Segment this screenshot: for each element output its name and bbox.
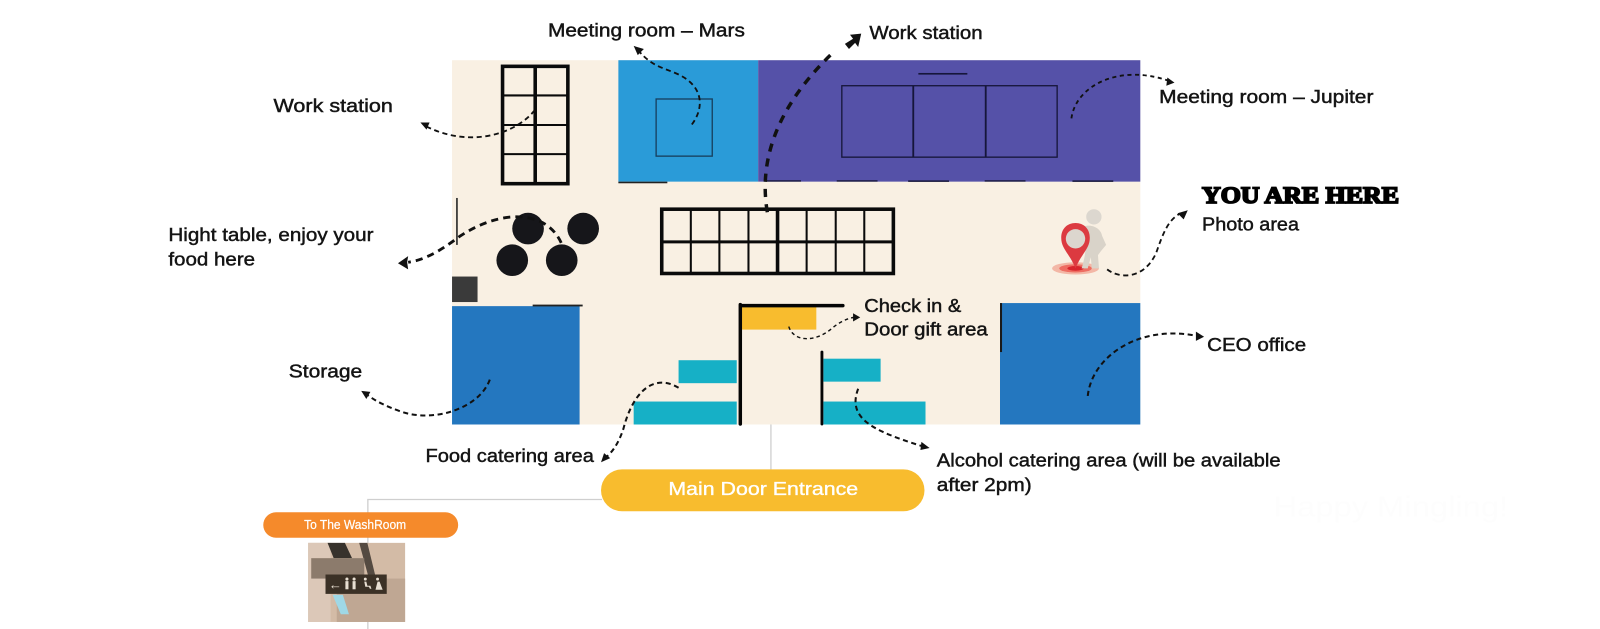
arrow: photo area <box>1107 210 1188 275</box>
arrow: high table <box>398 217 561 269</box>
label: food catering: Food catering area <box>426 445 594 466</box>
check in desk <box>742 307 816 330</box>
label: storage: Storage <box>289 361 362 382</box>
label: high table: food here <box>168 248 255 269</box>
alcohol catering tables <box>823 359 926 424</box>
button: to the washroom: To The WashRoom <box>304 517 406 532</box>
button: main door entrance <box>601 469 924 511</box>
arrow: storage <box>361 380 490 415</box>
label: CEO office: CEO office <box>1207 334 1306 355</box>
label: check in: Check in & <box>864 295 962 316</box>
label: photo area: Photo area <box>1202 214 1300 235</box>
arrow: meeting room jupiter <box>1071 75 1174 118</box>
label: alcohol catering: after 2pm) <box>937 474 1032 495</box>
faint text: happy mingling: Happy Mingling! <box>1273 491 1508 523</box>
label: high table <box>168 224 373 269</box>
left wall <box>456 198 458 245</box>
photo: washroom sign: ← <box>329 577 342 592</box>
floor plan <box>452 60 1140 425</box>
work station grid: centre <box>662 209 893 273</box>
label: meeting room mars: Meeting room – Mars <box>548 20 745 41</box>
arrow: work station left <box>420 110 535 137</box>
entrance wall right <box>821 352 823 424</box>
arrow: food catering <box>601 383 679 462</box>
label: check in <box>864 295 988 340</box>
icon: location pin with figure <box>1052 209 1106 274</box>
label: alcohol catering <box>937 449 1281 495</box>
arrow: check in <box>789 313 860 339</box>
floor background <box>452 60 1140 425</box>
button: to the washroom <box>263 512 458 538</box>
connector lines <box>368 424 771 629</box>
room: CEO office <box>1000 303 1140 424</box>
entrance walls <box>740 305 843 424</box>
arrow: meeting room mars <box>634 46 700 124</box>
arrow: alcohol catering <box>856 389 930 450</box>
room: Meeting room Jupiter <box>758 60 1140 182</box>
label: meeting room jupiter: Meeting room – Jupiter <box>1159 86 1373 107</box>
heading: you are here: YOU ARE HERE <box>1202 183 1399 209</box>
high tables <box>496 213 599 276</box>
button: main door entrance: Main Door Entrance <box>668 478 858 499</box>
label: work station left: Work station <box>273 95 393 116</box>
storage square <box>452 277 478 302</box>
food catering tables <box>634 360 737 424</box>
room: Meeting room Mars <box>618 60 758 183</box>
label: check in: Door gift area <box>864 319 988 340</box>
room: Storage <box>452 305 583 424</box>
label: work station centre: Work station <box>869 22 983 43</box>
arrow: work station centre <box>765 34 861 212</box>
label: alcohol catering: Alcohol catering area (will be available <box>937 449 1281 470</box>
photo: washroom sign <box>308 543 405 622</box>
work station grid: top left <box>503 66 568 184</box>
label: high table: Hight table, enjoy your <box>168 224 373 245</box>
arrow: CEO office <box>1088 332 1204 396</box>
